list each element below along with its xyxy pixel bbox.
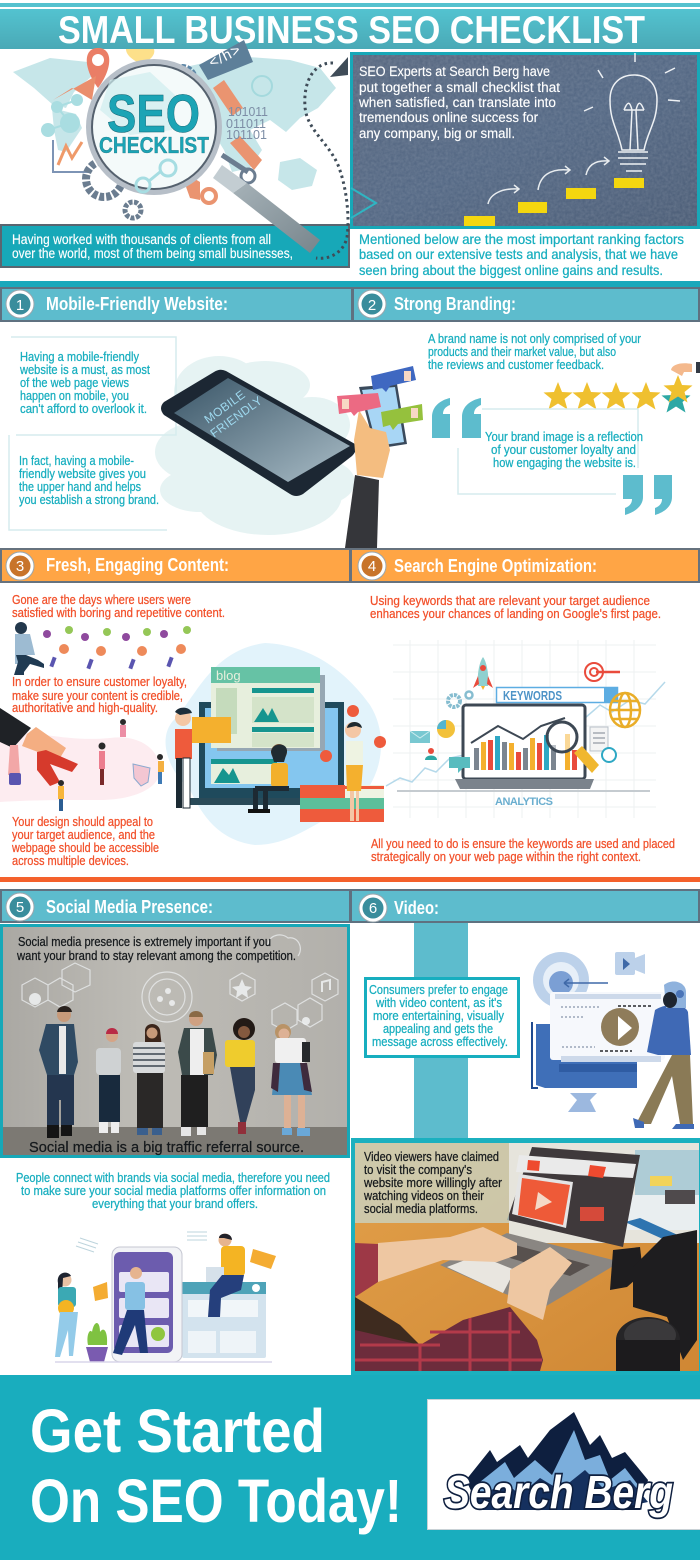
magnifier handle [213,165,320,253]
section 4: text bottom: strategically on your web page within the right context. [371,849,641,864]
magnet attracting customers [0,708,164,811]
envelope [410,731,430,743]
section 1: text block A [19,349,150,416]
caption: social media platforms. [364,1201,478,1216]
heading 4: Search Engine Optimization: [394,556,597,576]
avatar pins [320,705,386,762]
teal intro callout [1,225,349,267]
hands and forearms [378,1227,572,1320]
badge 6: 6 [369,900,377,917]
section 1: text block A: can't afford to overlook it. [20,401,147,416]
hero illustration: SEO magnifier over world map [13,40,336,218]
panel intro text: any company, big or small. [359,126,515,141]
video callout: with video content, as it's [375,995,502,1010]
orange pencils [213,80,262,170]
blog team illustration [166,643,386,845]
sitting man [206,1234,245,1317]
binary digits [226,105,268,142]
video card [550,992,665,1062]
chat bubbles [449,757,470,773]
section 3: text B: make sure your content is credible, [12,688,183,703]
footer call to action: On SEO Today! [30,1467,402,1535]
social text bottom: Social media is a big traffic referral source. [29,1139,304,1156]
panel intro text: SEO Experts at Search Berg have [359,64,550,79]
section 3: text C: Your design should appeal to [12,814,153,829]
heading 3: Fresh, Engaging Content: [46,555,229,575]
woman [345,722,363,821]
section 5: text: to make sure your social media platforms offer information on [21,1183,326,1198]
section 3: text A [12,592,225,620]
map pin [87,48,109,88]
rocket [473,657,493,690]
person 5 [225,1018,255,1134]
yellow chat balloon [126,49,154,64]
pie chart [437,720,455,738]
blue gear behind lens [169,67,195,93]
presenter [633,981,694,1129]
magnifier lens: SEO [107,84,200,144]
video illustration [532,952,694,1129]
badge 6 [359,894,387,922]
badge 2 [358,290,386,318]
video callout: more entertaining, visually [373,1008,505,1023]
section 1: text block A: happen on mobile, you [20,388,129,403]
binary digits: 011011 [226,117,266,131]
video callout: Consumers prefer to engage [369,982,508,997]
binary digits: 101011 [228,105,268,119]
network nodes [41,94,83,137]
arm sleeve [345,475,379,548]
heading 1 [1,288,352,321]
section 2: text top: the reviews and customer feedback. [428,357,604,372]
plaid sleeve left [355,1243,378,1297]
person 3 [133,1024,165,1135]
heading 6: Video: [394,898,439,918]
top rule [0,3,700,7]
badge 4 [358,552,386,580]
code tag sign [199,40,253,80]
hand placing star [671,362,700,376]
section 1: text block B [19,453,159,507]
shield [133,764,150,786]
bored man and falling shapes [14,622,191,675]
target [533,952,589,1008]
heading 4 [351,549,699,582]
review bubble pink [337,393,381,416]
plant [86,1323,108,1362]
heading 1: Mobile-Friendly Website: [46,294,228,314]
section 1: text block B: friendly website gives you [19,466,146,481]
section 1: text frames [9,337,176,530]
ranking factors intro text [359,231,684,278]
keyword search box: KEYWORDS [503,688,562,703]
bars [474,748,479,770]
video callout [366,978,518,1056]
target [585,663,620,681]
ranking factors intro text: based on our extensive tests and analysis, that we have [359,246,678,262]
section 5: text: everything that your brand offers. [92,1196,258,1211]
blurred shelf background [509,1143,699,1243]
section 4: text bottom [371,836,675,864]
section 5: text [16,1170,330,1211]
trend lines [386,682,665,786]
six young people with phones [39,1006,312,1138]
closing quote marks [623,475,672,515]
play button [601,1008,639,1046]
video callout: message across effectively. [372,1034,508,1049]
mountains [466,1412,648,1510]
section 3: text A: satisfied with boring and repetitive content. [12,605,225,620]
sleeve [0,708,31,748]
panel intro text [358,64,560,141]
footer call to action: Get Started [30,1397,325,1465]
person 2 [96,1028,121,1133]
code tag sign: </h> [206,41,244,72]
chalkboard panel [351,53,698,228]
heading 2 [353,288,699,321]
brand quote text: how engaging the website is. [493,455,636,470]
section 2: text top: products and their market value, but also [428,344,616,359]
section 3: text B: In order to ensure customer loyalty, [12,674,187,689]
large smartphone: MOBILE [202,387,248,426]
social media photo panel [2,926,348,1156]
badge 1: 1 [16,297,24,314]
section 3: text B: authoritative and high-quality. [12,700,158,715]
magnifier lens [86,59,222,195]
section 3: text C: your target audience, and the [12,827,155,842]
video callout: appealing and gets the [383,1021,493,1036]
review bubble blue [371,366,416,392]
dotted route arrow [305,57,348,258]
badge 5 [6,893,34,921]
section 1: text block A: of the web page views [20,375,129,390]
man in phone [113,1267,148,1355]
chalk arrows [488,157,609,204]
pale blob [166,643,381,845]
notch arrow [351,188,376,218]
analytics illustration [386,640,665,818]
hand [354,410,390,478]
browser window [182,1282,266,1358]
social text top: Social media presence is extremely important if you [18,934,271,949]
section 3: text C: webpage should be accessible [11,840,159,855]
orange divider [0,877,700,882]
globe [610,693,640,727]
grid backdrop [393,640,656,818]
brand quote text: of your customer loyalty and [491,442,636,457]
caption: to visit the company's [364,1162,472,1177]
gears [448,695,460,707]
laptop photo panel [351,1138,700,1375]
laptop [397,705,650,791]
section 2: text top: A brand name is not only comprised of your [428,331,642,346]
plug [8,745,20,775]
caption: watching videos on their [363,1188,485,1203]
document [590,727,608,751]
section 1: text block B: the upper hand and helps [19,479,141,494]
arrow [564,979,608,987]
clock [602,748,616,762]
touch icon [252,76,272,96]
section 4: text top: Using keywords that are relevant your target audience [370,593,650,608]
lower blog card [211,759,277,784]
heading 5: Social Media Presence: [46,897,213,917]
caption: Video viewers have claimed [364,1149,499,1164]
chalk light bulb [584,53,680,171]
review bubble green [381,404,423,430]
section 4: text top [370,593,661,621]
analytics label: ANALYTICS [495,796,553,808]
badge 3: 3 [16,558,24,575]
five star rating [544,375,692,412]
section 3: text A: Gone are the days where users were [12,592,191,607]
gray wrench [222,155,248,172]
section 3: text C [11,814,159,868]
falling shapes [43,630,168,641]
ranking factors intro text: seen bring about the biggest online gains and results. [359,262,663,278]
floating text lines [76,1232,207,1252]
monitor [532,1022,637,1112]
teal intro callout: Having worked with thousands of clients from all [12,232,271,247]
magnifying glass [547,722,599,773]
overlay hexagon graphics [22,935,338,1031]
teal intro callout: over the world, most of them being small businesses, [12,246,293,261]
section 1: text block B: you establish a strong brand. [19,492,159,507]
envelope left [93,1282,108,1301]
hand holding phone with reviews [337,366,423,548]
caption: website more willingly after [363,1175,503,1190]
caption [363,1149,503,1216]
overlay icons [29,979,330,1025]
badge 5: 5 [16,899,24,916]
large smartphone: FRIENDLY [208,393,265,440]
bored man [14,622,44,675]
badge 4: 4 [368,558,376,575]
badge 3 [6,552,34,580]
section 1: text block A: Having a mobile-friendly [20,349,140,364]
section 2: text top [428,331,642,372]
heading 2: Strong Branding: [394,294,516,314]
heading 5 [1,890,350,922]
book stack [300,785,384,822]
person 6 [271,1024,312,1136]
section 4: text top: enhances your chances of landing on Google's first page. [370,606,661,621]
section 3: text C: across multiple devices. [12,853,129,868]
line graph [471,718,565,743]
wrench [180,170,200,200]
logo box [428,1400,700,1530]
heading 3 [1,549,350,582]
social text top [16,934,296,963]
woman [55,1273,78,1357]
hand [22,727,66,758]
section 5: text: People connect with brands via social media, therefore you need [16,1170,330,1185]
large smartphone [161,370,356,496]
camera body [610,1230,697,1360]
opening quote marks [432,398,481,438]
brand quote frame [458,409,638,494]
footer call to action [30,1397,402,1535]
camera icon [615,952,645,975]
binary digits: 101101 [226,128,267,142]
chart frame with trend [53,140,90,172]
person 1 [39,1006,78,1138]
badge 2: 2 [368,297,376,314]
section divider [0,281,700,287]
ground shadow [55,1361,272,1363]
world map [13,56,336,190]
yellow step blocks [464,178,644,226]
table edge shadow [355,1297,420,1345]
keyword search box [496,687,618,703]
laptop keyboard base [440,1233,615,1308]
panel intro text: tremendous online success for [359,110,538,125]
brand quote text: Your brand image is a reflection [485,429,643,444]
footer band [0,1375,700,1560]
seated man [248,744,289,813]
monitor [190,702,344,805]
section 3: text B [12,674,187,715]
user icon [425,748,437,760]
magnifier lens: CHECKLIST [99,132,209,158]
laptop lid [507,1147,640,1247]
panel intro text: when satisfied, can translate into [358,95,556,110]
man with folder [175,708,231,808]
envelope right [250,1249,276,1269]
blog page [211,667,325,751]
section 1: text block B: In fact, having a mobile- [19,453,134,468]
camera lens [616,1317,680,1371]
social text top: want your brand to stay relevant among the competition. [16,948,296,963]
panel intro text: put together a small checklist that [359,80,560,95]
blog page: blog [216,668,241,683]
customers [58,719,164,811]
section 1: mobile blobs [155,356,355,535]
magnet [37,750,78,786]
orange paper plane [53,76,96,100]
heading 6 [351,890,699,922]
badge 1 [6,290,34,318]
plaid sleeve lower [355,1307,543,1371]
small phone [359,384,407,449]
caption backdrop [355,1143,509,1223]
person 4 [178,1011,217,1136]
ranking factors intro text: Mentioned below are the most important ranking factors [359,231,684,247]
phone [112,1247,182,1362]
section 6: vertical band [414,923,468,1138]
brand quote text [485,429,643,470]
social app illustration [55,1232,276,1362]
pavement [3,1127,347,1155]
gears [86,161,122,197]
section 1: text block A: website is a must, as most [19,362,150,377]
